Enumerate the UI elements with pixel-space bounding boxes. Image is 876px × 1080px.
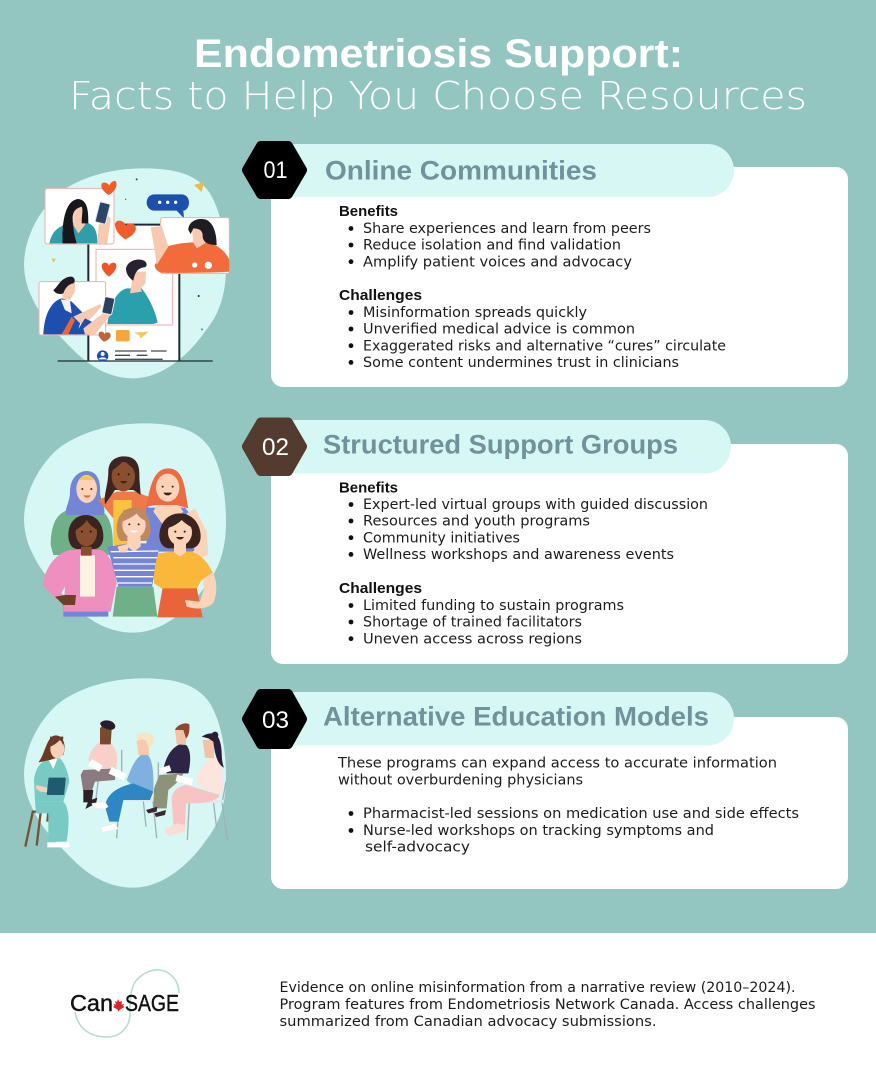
number badge: 01: [264, 157, 288, 184]
chairs: [96, 750, 227, 840]
card: [271, 717, 848, 889]
challenges list: Some content undermines trust in clinicians: [363, 355, 679, 371]
sources text: Program features from Endometriosis Network Canada. Access challenges: [280, 997, 816, 1013]
participant: dark top: [146, 723, 190, 817]
woman with dark long hair: [98, 456, 148, 545]
card: woman in blue: [39, 277, 115, 335]
intro text: without overburdening physicians: [338, 773, 583, 789]
participant: pink top: [81, 720, 117, 809]
benefits list: Community initiatives: [363, 530, 520, 546]
intro text: [337, 756, 777, 789]
heading: Structured Support Groups: [323, 430, 678, 460]
sources text: [280, 980, 816, 1030]
card: woman in orange: [151, 218, 229, 273]
panel: alternative education models: [247, 692, 848, 889]
woman in hijab: [51, 471, 113, 555]
illustration: online communities: [24, 168, 229, 378]
benefits list: Amplify patient voices and advocacy: [363, 254, 632, 270]
heading: Alternative Education Models: [323, 702, 709, 732]
number badge: 02: [262, 434, 289, 461]
program list: [349, 806, 799, 856]
panel: online communities: [247, 144, 848, 387]
stool: [25, 812, 49, 847]
benefits list: [339, 479, 708, 563]
benefits list: Share experiences and learn from peers: [363, 221, 651, 237]
icon: large heart: [115, 221, 136, 239]
sources text: Evidence on online misinformation from a narrative review (2010–2024).: [280, 980, 796, 996]
post card with centre person: [96, 249, 173, 325]
benefits list: Benefits: [339, 479, 398, 496]
program list: Pharmacist-led sessions on medication use and side effects: [363, 806, 799, 822]
illustration: seated education group: [24, 678, 227, 888]
card: [271, 167, 848, 387]
participant: blue top: [92, 733, 154, 832]
title: Facts to Help You Choose Resources: [69, 74, 807, 118]
nurse: [34, 735, 69, 847]
number badge: [247, 422, 302, 471]
illustration: group of six women: [24, 423, 226, 633]
challenges list: Shortage of trained facilitators: [363, 615, 582, 631]
benefits list: Wellness workshops and awareness events: [363, 547, 674, 563]
challenges list: Misinformation spreads quickly: [363, 305, 587, 321]
woman in striped top: [107, 508, 160, 617]
benefits list: [339, 203, 651, 270]
header pill: [270, 692, 734, 746]
woman with red hair: [146, 468, 208, 560]
card: woman with phone: [45, 181, 117, 244]
challenges list: Challenges: [339, 580, 422, 597]
program list: self-advocacy: [365, 840, 470, 856]
woman in pink blazer: [43, 515, 117, 617]
participant: white top and pink trousers: [164, 732, 224, 836]
panel: structured support groups: [247, 420, 848, 664]
footer: [0, 933, 876, 1080]
logo: Can-SAGE: Can: [70, 990, 113, 1016]
benefits list: Resources and youth programs: [363, 514, 590, 530]
speech bubble: [147, 194, 189, 218]
logo: Can-SAGE: SAGE: [125, 990, 179, 1016]
challenges list: Exaggerated risks and alternative “cures” circulate: [363, 338, 726, 354]
challenges list: Limited funding to sustain programs: [363, 598, 624, 614]
program list: Nurse-led workshops on tracking symptoms and: [363, 823, 714, 839]
sources text: summarized from Canadian advocacy submissions.: [280, 1014, 656, 1030]
feed icons: [97, 330, 167, 362]
challenges list: Unverified medical advice is common: [363, 322, 635, 338]
number badge: 03: [262, 707, 289, 734]
woman in yellow top: [154, 513, 216, 617]
challenges list: [339, 580, 624, 647]
heading: Online Communities: [325, 156, 597, 186]
logo: Can-SAGE: [70, 970, 179, 1037]
challenges list: Challenges: [339, 287, 422, 304]
number badge: [247, 694, 302, 744]
benefits list: Expert-led virtual groups with guided discussion: [363, 497, 708, 513]
header pill: [270, 144, 734, 197]
card: [271, 444, 848, 664]
sparkles: [51, 178, 204, 330]
benefits list: Benefits: [339, 203, 398, 220]
title: Endometriosis Support:: [194, 32, 683, 76]
benefits list: Reduce isolation and find validation: [363, 238, 621, 254]
number badge: [247, 146, 302, 194]
intro text: These programs can expand access to accurate information: [337, 756, 777, 772]
challenges list: [339, 287, 726, 371]
header pill: [270, 420, 731, 474]
title: [69, 32, 807, 118]
challenges list: Uneven access across regions: [363, 631, 582, 647]
